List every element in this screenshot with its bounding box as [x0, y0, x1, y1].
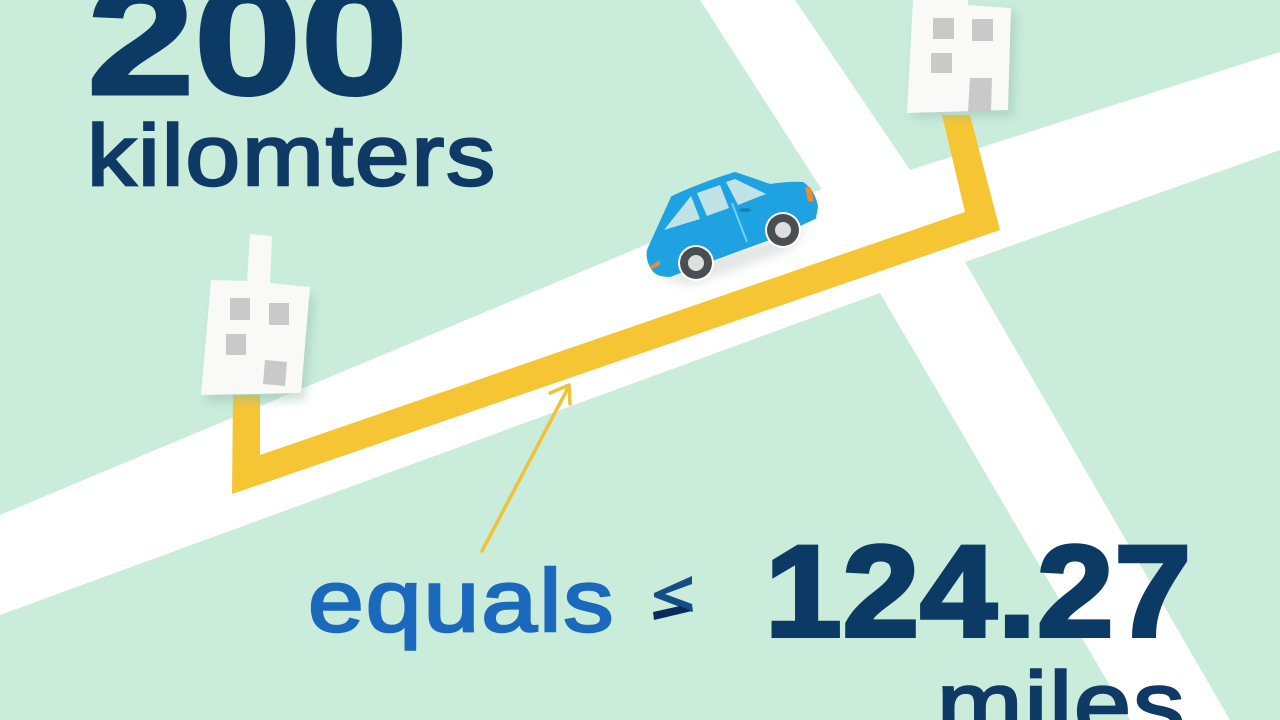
cross road: [700, 0, 1230, 720]
icon: less than or equal sign: [653, 576, 693, 620]
yellow route line: [232, 115, 1000, 494]
car lights: [805, 187, 813, 202]
heading: 124.27: 124.27: [765, 520, 1191, 664]
front wheel: [678, 245, 714, 281]
car windows: [664, 179, 766, 230]
heading: kilomters: kilomters: [87, 108, 495, 204]
main road: [0, 52, 1280, 615]
text: equals: equals: [308, 552, 614, 650]
building: right: [907, 0, 1016, 118]
arrow: [482, 385, 570, 551]
rear wheel: [765, 212, 801, 248]
car body: [648, 173, 817, 276]
building: left: [201, 234, 314, 402]
car: [648, 173, 817, 285]
